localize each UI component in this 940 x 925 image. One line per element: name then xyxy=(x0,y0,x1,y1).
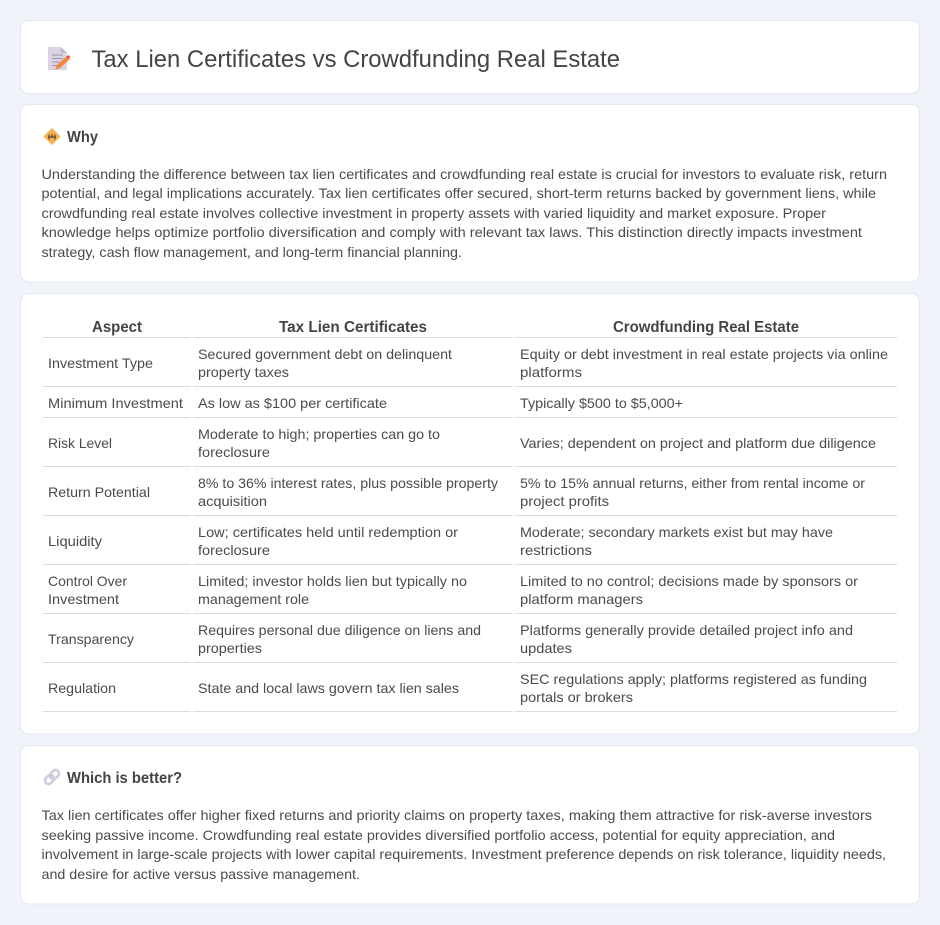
row: liquidity: foreclosure xyxy=(198,542,270,558)
row: return potential xyxy=(43,475,897,516)
title: Tax Lien Certificates vs Crowdfunding Real Estate xyxy=(92,46,620,73)
text block: verdict paragraph: seeking passive income. Crowdfunding real estate provides diversified portfolio access, potential for equity appreciation, and xyxy=(42,827,835,843)
row: control over investment: Control Over xyxy=(48,573,127,589)
row: investment type: Investment Type xyxy=(48,355,153,371)
icon: memo with pencil xyxy=(48,47,70,70)
row: control over investment: Limited; investor holds lien but typically no xyxy=(198,573,467,589)
row: investment type: Equity or debt investment in real estate projects via online xyxy=(520,346,888,362)
row: transparency: Requires personal due diligence on liens and xyxy=(198,622,481,638)
text block: verdict paragraph: Tax lien certificates offer higher fixed returns and priority claims on property taxes, making them attractive for risk-averse investors xyxy=(42,807,872,823)
row: minimum investment: Typically $500 to $5,000+ xyxy=(520,395,683,411)
row: investment type: Secured government debt on delinquent xyxy=(198,346,452,362)
row: control over investment xyxy=(43,573,897,614)
table header row xyxy=(43,319,897,338)
row: liquidity: Moderate; secondary markets exist but may have xyxy=(520,524,833,540)
table header row: Tax Lien Certificates xyxy=(279,319,427,336)
row: risk level: Moderate to high; properties can go to xyxy=(198,426,440,442)
text block: why paragraph xyxy=(42,166,887,260)
row: transparency: Platforms generally provide detailed project info and xyxy=(520,622,853,638)
icon: chain link xyxy=(43,768,61,786)
row: transparency: properties xyxy=(198,640,262,656)
row: investment type: platforms xyxy=(520,364,582,380)
row: control over investment: platform managers xyxy=(520,591,643,607)
text block: verdict paragraph: involvement in large-scale projects with lower capital requirements. Investment preference depends on risk tolerance, liquidity needs, xyxy=(42,846,886,862)
text block: why paragraph: potential, and legal implications accurately. Tax lien certificates offer secured, short-term returns backed by government liens, while xyxy=(42,185,876,201)
heading: why: Why xyxy=(67,129,98,146)
row: control over investment: Limited to no control; decisions made by sponsors or xyxy=(520,573,858,589)
panel: title card xyxy=(20,20,920,94)
row: regulation: Regulation xyxy=(48,680,116,696)
text block: why paragraph: crowdfunding real estate involves collective investment in property assets with varied liquidity and market exposure. Proper xyxy=(42,205,826,221)
row: return potential: 8% to 36% interest rates, plus possible property xyxy=(198,475,498,491)
row: investment type: property taxes xyxy=(198,364,289,380)
row: transparency: updates xyxy=(520,640,572,656)
row: regulation: State and local laws govern tax lien sales xyxy=(198,680,459,696)
row: investment type xyxy=(43,346,897,387)
text block: why paragraph: knowledge helps optimize portfolio diversification and comply with relevant tax laws. This distinction directly impacts investment xyxy=(42,224,862,240)
panel: which is better xyxy=(20,746,920,904)
row: risk level xyxy=(43,426,897,467)
row: transparency xyxy=(43,622,897,663)
text block: verdict paragraph: and desire for active versus passive management. xyxy=(42,866,360,882)
panel: why xyxy=(20,104,920,282)
row: liquidity: restrictions xyxy=(520,542,592,558)
row: minimum investment xyxy=(43,395,897,418)
row: return potential: acquisition xyxy=(198,493,267,509)
row: regulation: SEC regulations apply; platforms registered as funding xyxy=(520,671,867,687)
text block: why paragraph: strategy, cash flow management, and long-term financial planning. xyxy=(42,244,462,260)
row: minimum investment: Minimum Investment xyxy=(48,395,183,411)
heading: which is better: Which is better? xyxy=(67,770,182,787)
text block: why paragraph: Understanding the difference between tax lien certificates and crowdfunding real estate is crucial for investors to evaluate risk, return xyxy=(42,166,887,182)
row: regulation: portals or brokers xyxy=(520,689,633,705)
row: regulation xyxy=(43,671,897,712)
row: risk level: foreclosure xyxy=(198,444,270,460)
row: control over investment: Investment xyxy=(48,591,119,607)
row: risk level: Varies; dependent on project and platform due diligence xyxy=(520,435,876,451)
table header row: Crowdfunding Real Estate xyxy=(613,319,799,336)
row: return potential: project profits xyxy=(520,493,609,509)
icon: warning diamond xyxy=(44,128,60,145)
text block: verdict paragraph xyxy=(42,807,886,882)
table header row: Aspect xyxy=(92,319,143,336)
panel: comparison table xyxy=(20,294,920,734)
row: minimum investment: As low as $100 per certificate xyxy=(198,395,387,411)
row: liquidity: Low; certificates held until redemption or xyxy=(198,524,458,540)
row: control over investment: management role xyxy=(198,591,309,607)
row: return potential: 5% to 15% annual returns, either from rental income or xyxy=(520,475,865,491)
row: return potential: Return Potential xyxy=(48,484,150,500)
row: liquidity: Liquidity xyxy=(48,533,102,549)
row: liquidity xyxy=(43,524,897,565)
row: risk level: Risk Level xyxy=(48,435,112,451)
row: transparency: Transparency xyxy=(48,631,134,647)
